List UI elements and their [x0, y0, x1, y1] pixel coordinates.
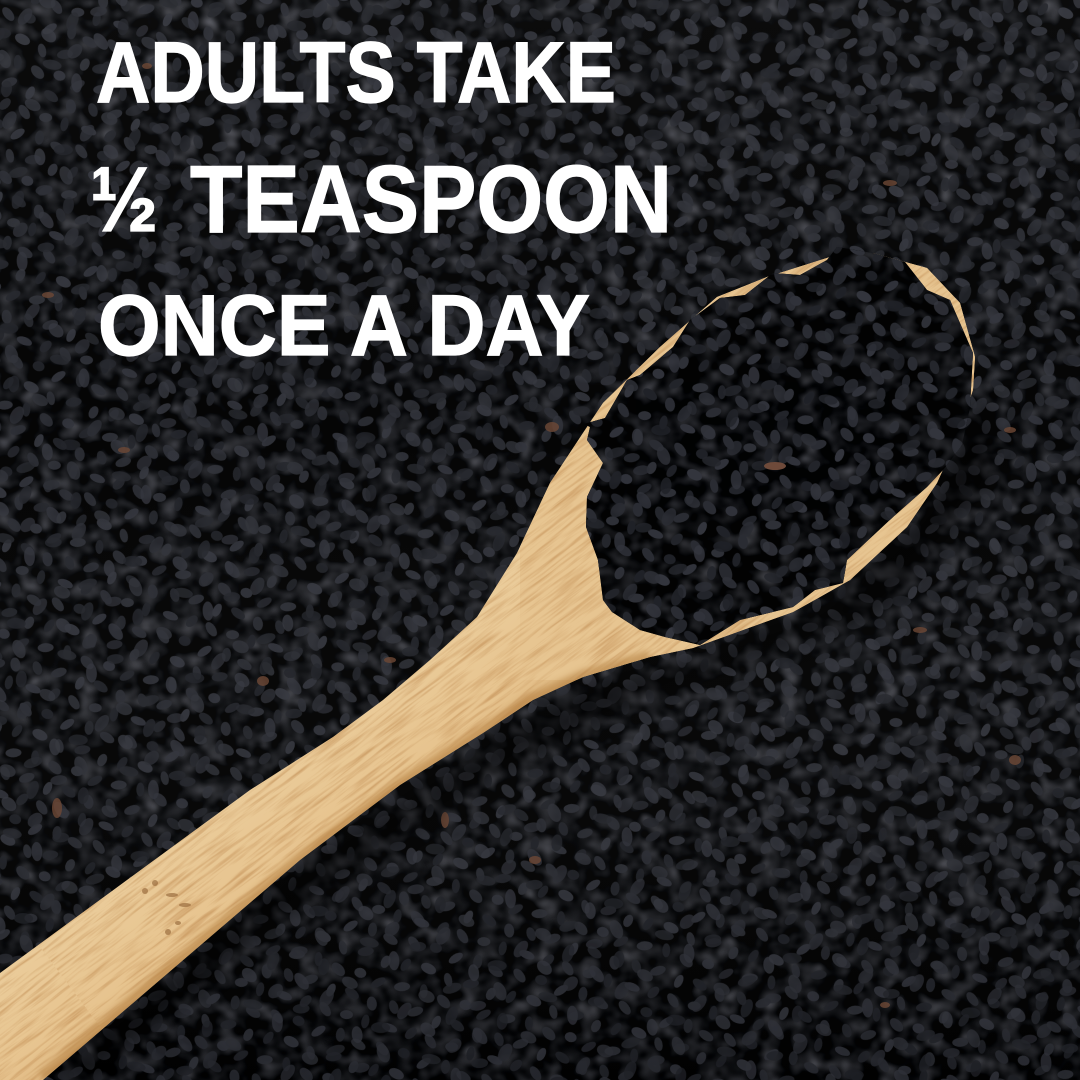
- line 2: teaspoon: TEASPOON: [190, 146, 672, 253]
- wood grain: [0, 258, 974, 1080]
- title text: [90, 25, 672, 374]
- line 1: adults take: ADULTS TAKE: [96, 25, 616, 121]
- wooden spoon: [0, 253, 975, 1080]
- brown seed specks: [42, 63, 1021, 1008]
- spoon shadow: [50, 400, 990, 1075]
- bamboo node marks: [142, 880, 191, 935]
- line 3: once a day: ONCE A DAY: [98, 278, 590, 374]
- line 2: one half fraction: ½: [90, 149, 158, 251]
- handle lower edge bevel: [43, 657, 650, 1078]
- seeds heaped in spoon bowl: [586, 247, 973, 645]
- brown seed in bowl: [764, 462, 786, 470]
